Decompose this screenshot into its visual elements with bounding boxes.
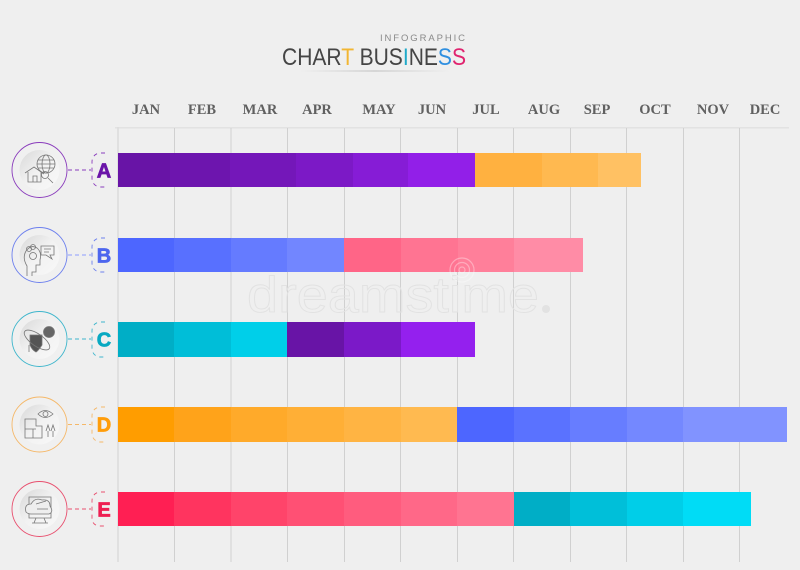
month axis labels: DEC — [750, 102, 780, 118]
month axis labels — [132, 102, 780, 118]
icon: monitor and cloud — [26, 497, 52, 523]
month axis labels: JAN — [132, 102, 161, 118]
month axis labels: OCT — [639, 102, 671, 118]
month axis labels: MAR — [243, 102, 278, 118]
row marker D — [12, 397, 111, 452]
month axis labels: FEB — [188, 102, 216, 118]
icon: shield and atom — [21, 326, 54, 354]
row marker C — [12, 312, 111, 366]
row marker A — [12, 142, 111, 198]
bracket — [92, 238, 105, 272]
connector — [68, 338, 91, 340]
row marker E — [12, 482, 111, 536]
connector — [68, 169, 91, 171]
label E: E — [97, 500, 111, 522]
bracket — [92, 407, 105, 442]
title: CHART BUSINESS — [282, 44, 466, 71]
label C: C — [97, 330, 111, 352]
icon: house and globe — [25, 155, 55, 183]
row marker B — [12, 228, 111, 282]
label D: D — [97, 414, 111, 436]
month axis labels: MAY — [362, 102, 396, 118]
icon: puzzle and eye — [25, 410, 55, 438]
title — [282, 33, 466, 72]
icon: head with speech bubble — [24, 244, 54, 276]
bracket — [92, 153, 105, 187]
connector — [68, 424, 91, 426]
title: INFOGRAPHIC — [380, 33, 465, 44]
label A: A — [97, 160, 111, 182]
bar C — [118, 322, 475, 357]
connector — [68, 508, 91, 510]
bar A — [118, 153, 641, 187]
month axis labels: JUN — [418, 102, 447, 118]
bar D — [118, 407, 787, 442]
bracket — [92, 492, 105, 526]
month axis labels: APR — [302, 102, 332, 118]
month axis labels: SEP — [584, 102, 610, 118]
bar B — [118, 238, 583, 272]
watermark: dreamstime — [247, 267, 539, 323]
chart grid lines — [115, 127, 789, 562]
month axis labels: NOV — [697, 102, 730, 118]
month axis labels: JUL — [472, 102, 500, 118]
month axis labels: AUG — [528, 102, 560, 118]
label B: B — [97, 246, 111, 268]
bracket — [92, 322, 105, 357]
connector — [68, 254, 91, 256]
bar E — [118, 492, 751, 526]
